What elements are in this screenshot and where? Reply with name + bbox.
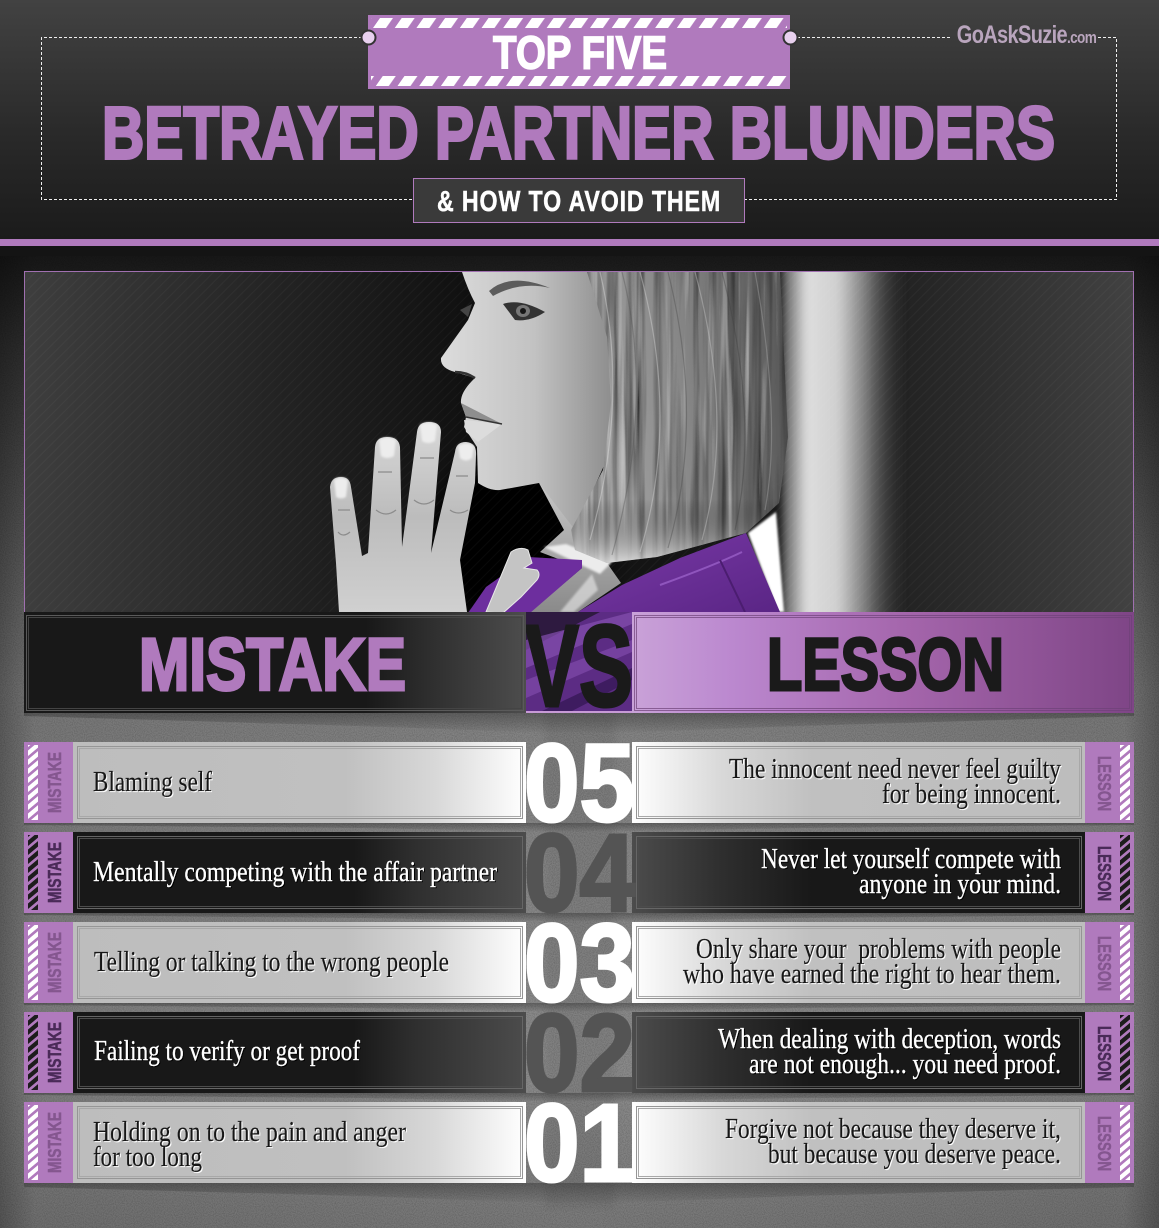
row 01 mistake text panel: Holding on to the pain and anger — [93, 1117, 407, 1148]
row 01 lesson tab — [1085, 1102, 1134, 1183]
subtitle box — [414, 178, 744, 222]
row 05 — [24, 722, 1134, 845]
row 03 lesson text panel — [632, 922, 1085, 1003]
row 02 lesson tab — [1085, 1012, 1134, 1093]
bright wall edge — [748, 512, 784, 612]
row 02 mistake tab: MISTAKE — [45, 1022, 65, 1083]
diagonal texture — [432, 446, 616, 612]
row 01 mistake tab: MISTAKE — [45, 1112, 65, 1173]
row 04 mistake tab: MISTAKE — [45, 842, 65, 903]
row 05 lesson text panel: The innocent need never feel guilty — [729, 754, 1061, 785]
row 04 lesson text panel: Never let yourself compete with — [761, 844, 1061, 875]
panel: mistake header — [24, 612, 526, 713]
row 01 mistake tab — [24, 1102, 73, 1183]
hand — [330, 422, 476, 612]
row 02 mistake text panel: Failing to verify or get proof — [94, 1036, 361, 1067]
banner: top five — [368, 15, 790, 89]
row 03 mistake text panel — [73, 922, 526, 1003]
photo border — [24, 272, 1134, 612]
panel: mistake header: MISTAKE — [139, 623, 406, 706]
panel: lesson header — [632, 612, 1134, 713]
panel: vs: VS — [525, 601, 633, 731]
neck and chest — [530, 483, 621, 612]
panel: lesson header: LESSON — [767, 623, 1004, 706]
number 05: 05 — [524, 722, 635, 845]
second hand — [486, 548, 539, 613]
row 03 lesson text panel: who have earned the right to hear them. — [683, 959, 1061, 990]
row 05 lesson text panel: for being innocent. — [882, 779, 1061, 810]
row 01 — [24, 1082, 1134, 1205]
wall behind woman — [782, 262, 907, 622]
site logo: GoAskSuzie.com — [957, 21, 1097, 49]
row 01 lesson text panel: but because you deserve peace. — [768, 1139, 1061, 1170]
row 01 mistake text panel — [73, 1102, 526, 1183]
row 05 mistake text panel — [73, 742, 526, 823]
row 02 — [24, 992, 1134, 1115]
row 02 lesson tab: LESSON — [1094, 1026, 1114, 1081]
row 02 lesson text panel: are not enough... you need proof. — [749, 1049, 1061, 1080]
nose shadow and mouth — [455, 372, 502, 442]
row 03 lesson tab: LESSON — [1094, 936, 1114, 991]
row 04 lesson text panel — [632, 832, 1085, 913]
row 05 mistake tab: MISTAKE — [45, 752, 65, 813]
row 04 lesson tab — [1085, 832, 1134, 913]
photo panel — [24, 262, 1134, 630]
row 04 lesson text panel: anyone in your mind. — [859, 869, 1061, 900]
row 01 lesson text panel: Forgive not because they deserve it, — [725, 1114, 1061, 1145]
neck highlights — [544, 544, 612, 612]
page background — [0, 246, 1159, 1228]
row 05 mistake tab — [24, 742, 73, 823]
row 02 lesson text panel — [632, 1012, 1085, 1093]
banner: top five: TOP FIVE — [493, 26, 667, 78]
row 04 mistake text panel: Mentally competing with the affair partner — [93, 857, 498, 888]
header band — [0, 0, 1159, 246]
row 01 lesson tab: LESSON — [1094, 1116, 1114, 1171]
row 05 lesson tab — [1085, 742, 1134, 823]
number 01: 01 — [524, 1082, 635, 1205]
panel: vs — [526, 612, 632, 713]
face — [441, 272, 611, 530]
row 03 mistake tab: MISTAKE — [45, 932, 65, 993]
number 02: 02 — [524, 992, 635, 1115]
row 03 mistake text panel: Telling or talking to the wrong people — [94, 947, 449, 978]
number 04: 04 — [524, 812, 635, 935]
row 04 mistake tab — [24, 832, 73, 913]
row 02 mistake text panel — [73, 1012, 526, 1093]
banner pin right — [784, 30, 798, 44]
row 03 — [24, 902, 1134, 1025]
number 03: 03 — [524, 902, 635, 1025]
shirt — [468, 533, 780, 613]
row 04 — [24, 812, 1134, 935]
eye — [460, 281, 550, 320]
banner pin left — [362, 30, 376, 44]
subtitle box: & HOW TO AVOID THEM — [437, 184, 720, 218]
row 03 mistake tab — [24, 922, 73, 1003]
row 04 mistake text panel — [73, 832, 526, 913]
row 05 lesson tab: LESSON — [1094, 756, 1114, 811]
row shadows — [24, 823, 1134, 1204]
row 01 lesson text panel — [632, 1102, 1085, 1183]
row 03 lesson tab — [1085, 922, 1134, 1003]
dashed frame — [42, 38, 1116, 200]
row 03 lesson text panel: Only share your problems with people — [696, 934, 1061, 965]
header shadow — [24, 713, 1134, 734]
row 05 lesson text panel — [632, 742, 1085, 823]
row 02 lesson text panel: When dealing with deception, words — [718, 1024, 1061, 1055]
row 04 lesson tab: LESSON — [1094, 846, 1114, 901]
row 05 mistake text panel: Blaming self — [93, 767, 213, 798]
hair — [571, 272, 788, 563]
row 01 mistake text panel: for too long — [93, 1142, 202, 1173]
row 02 mistake tab — [24, 1012, 73, 1093]
